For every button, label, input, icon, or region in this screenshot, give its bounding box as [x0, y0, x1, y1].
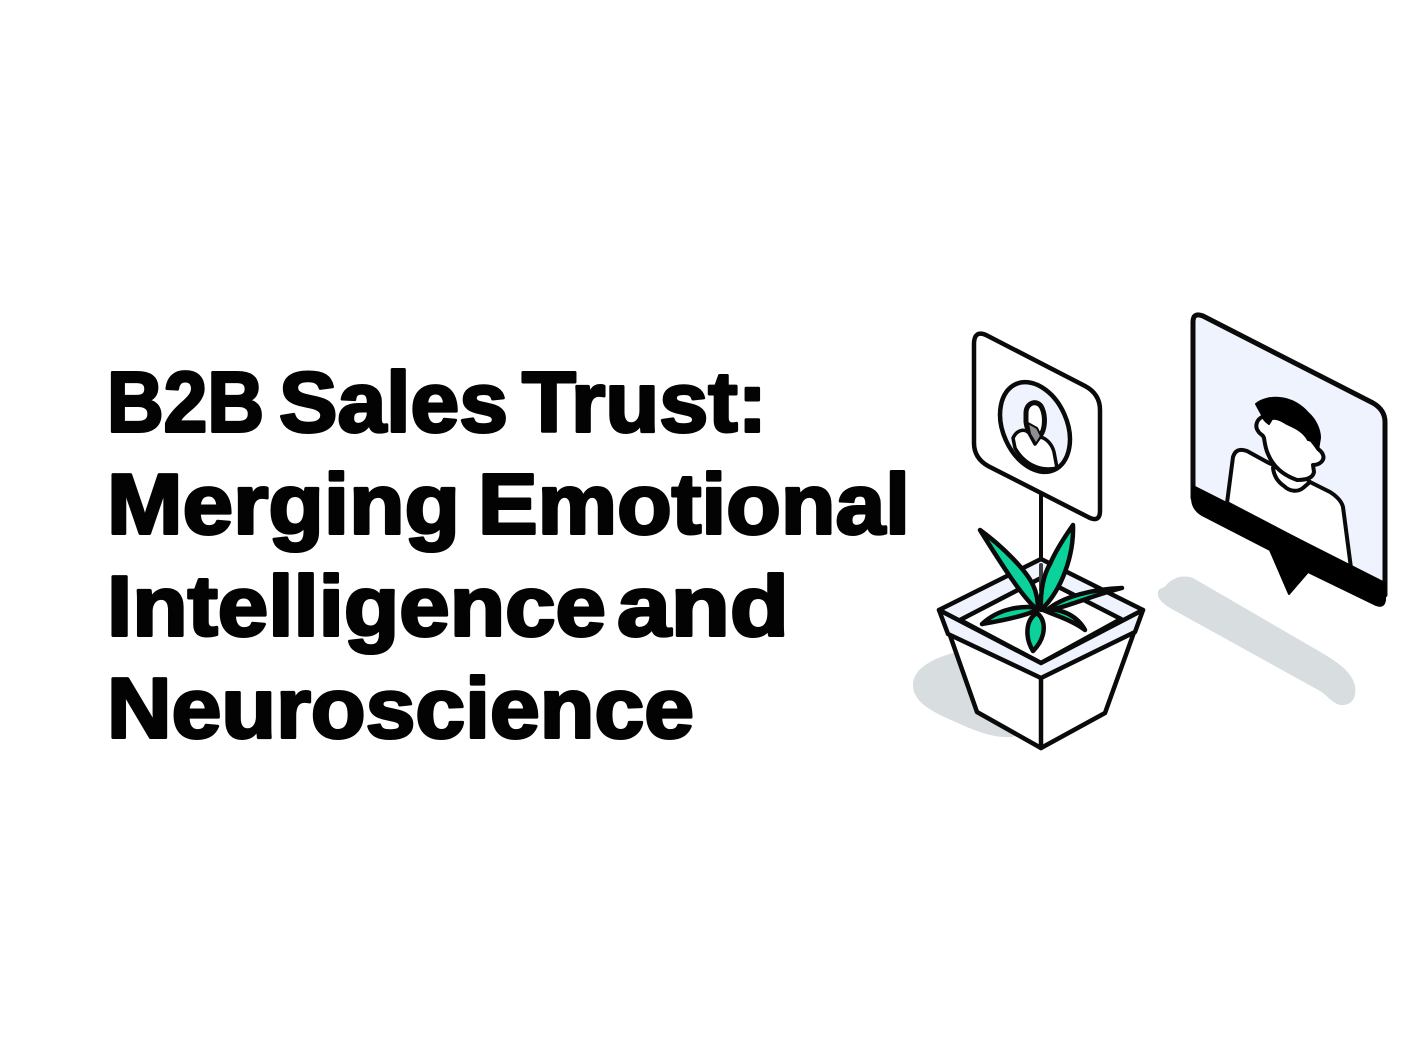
pot rim top: [939, 559, 1143, 663]
profile avatar: [987, 371, 1083, 483]
title: B2B: [107, 356, 264, 450]
bubble bottom bar and pointer: [1192, 486, 1385, 606]
sign post: [1039, 492, 1043, 590]
person neck: [1273, 462, 1310, 491]
avatar head: [1026, 403, 1044, 437]
pot: [939, 559, 1143, 748]
leaf: bottom: [1027, 613, 1044, 651]
leaf: upper right: [1041, 525, 1073, 610]
leaf: right: [1046, 588, 1122, 611]
avatar beard: [1028, 423, 1041, 444]
sign post base: [1039, 565, 1043, 590]
pot body: [946, 624, 1137, 748]
pot soil: [960, 578, 1121, 663]
illustration: video call speech bubble: [1158, 315, 1385, 705]
person head: [1256, 412, 1323, 480]
person torso: [1227, 450, 1351, 568]
title: and: [617, 560, 789, 654]
title: [107, 356, 910, 756]
title: Emotional: [478, 458, 910, 552]
bubble screen: [1193, 315, 1385, 595]
avatar body: [1013, 430, 1057, 469]
profile sign board: [974, 334, 1100, 519]
leaf: upper left: [980, 530, 1038, 610]
bubble shadow: [1158, 576, 1355, 705]
plant leaves: [980, 525, 1122, 651]
pot shadow: [913, 650, 1030, 737]
leaf: lower right: [1043, 609, 1085, 630]
title: Trust:: [522, 356, 767, 450]
title: Intelligence: [107, 560, 606, 654]
leaf: lower left: [982, 607, 1040, 624]
person hair: [1256, 398, 1320, 450]
title: Sales: [279, 356, 508, 450]
illustration: plant with profile sign: [913, 334, 1143, 748]
title: Merging: [107, 458, 460, 552]
title: Neuroscience: [107, 662, 694, 756]
pot rim front band: [939, 610, 1143, 678]
avatar circle: [987, 371, 1083, 483]
